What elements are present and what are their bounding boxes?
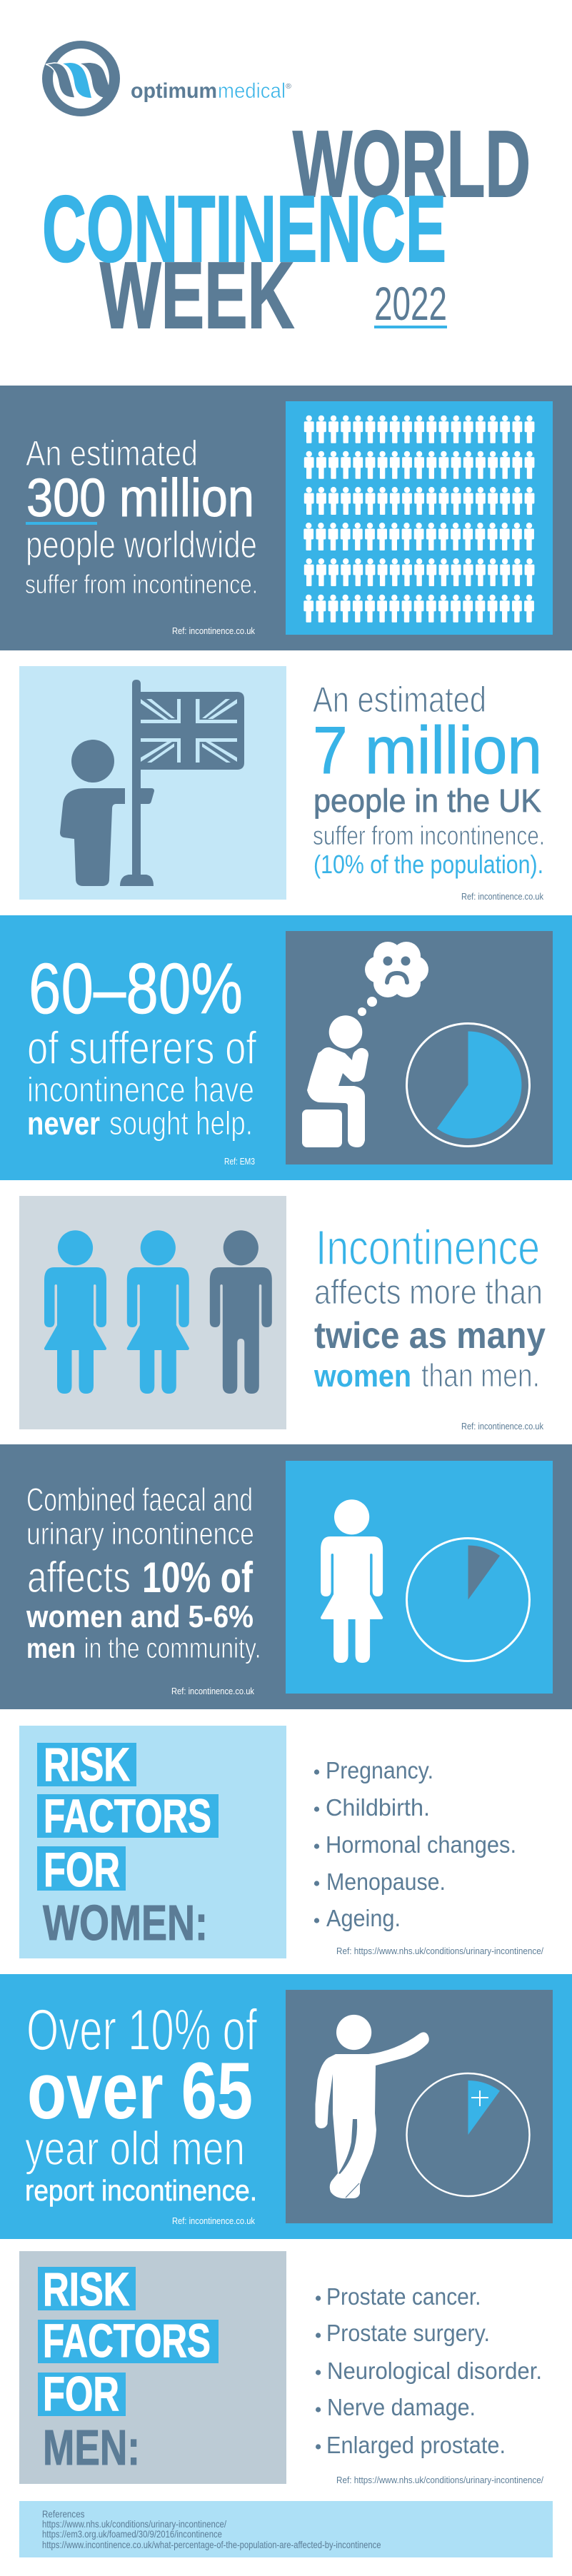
year underline — [374, 326, 447, 328]
headline text: incontinence have — [27, 1071, 254, 1110]
icon: woman — [127, 1230, 189, 1394]
headline text: women and 5-6% — [26, 1599, 254, 1634]
headline text: An estimated — [26, 433, 198, 473]
panel: references — [19, 2501, 553, 2557]
headline text: report incontinence. — [25, 2174, 257, 2207]
light blue box — [19, 1726, 286, 1958]
list: women risk factors: Ageing. — [326, 1905, 401, 1931]
headline text — [26, 1481, 261, 1664]
icon: logo waves — [46, 63, 113, 98]
references text: https://em3.org.uk/foamed/30/9/2016/incontinence — [42, 2528, 222, 2540]
panel: 60-80% never sought help — [0, 915, 572, 1180]
headline text: year old men — [25, 2122, 245, 2175]
people pictogram grid — [303, 416, 534, 623]
headline text: of sufferers of — [27, 1022, 257, 1074]
headline text: suffer from incontinence. — [25, 570, 258, 599]
list: women risk factors: Hormonal changes. — [326, 1831, 516, 1858]
list: women risk factors — [314, 1757, 516, 1931]
panel: twice as many women — [19, 1196, 546, 1432]
slate box — [286, 931, 553, 1164]
icon: woman — [44, 1230, 106, 1394]
headline text: people in the UK — [313, 783, 541, 819]
panel: risk factors for men — [19, 2251, 543, 2485]
title: week: WEEK — [100, 243, 294, 348]
panel: 300 million worldwide — [0, 386, 572, 650]
panel: over 65 men — [0, 1974, 572, 2239]
references text: https://www.nhs.uk/conditions/urinary-incontinence/ — [42, 2518, 226, 2530]
label: factors: FACTORS — [44, 1789, 211, 1842]
headline text: men — [26, 1634, 76, 1664]
icon: man — [210, 1230, 272, 1394]
reference: Ref: https://www.nhs.uk/conditions/urinary-incontinence/ — [336, 1946, 543, 1956]
sad face — [383, 957, 410, 982]
references text: https://www.incontinence.co.uk/what-percentage-of-the-population-are-affected-by-incontinence — [42, 2539, 381, 2550]
references background — [19, 2501, 553, 2557]
title — [42, 111, 531, 348]
references text: References — [42, 2508, 84, 2520]
headline text: 300 million — [26, 468, 254, 528]
grey box — [19, 1196, 286, 1429]
panel: 7 million in the UK — [19, 666, 545, 902]
underline under 300 — [26, 522, 97, 525]
icon: man leaning with crossed legs — [316, 2015, 429, 2198]
headline text — [27, 949, 257, 1142]
list: men risk factors: Enlarged prostate. — [326, 2432, 506, 2458]
label: for: FOR — [43, 2367, 119, 2421]
headline text: than men. — [421, 1357, 540, 1394]
panel: risk factors for women — [19, 1726, 543, 1958]
list: men risk factors — [316, 2283, 542, 2458]
headline text — [313, 1220, 546, 1394]
blue box with people pictogram — [286, 401, 553, 635]
headline text: women — [313, 1359, 411, 1394]
icon: person holding union flag — [60, 680, 244, 886]
light blue box — [19, 666, 286, 900]
blue box — [286, 1461, 553, 1694]
logo wordmark: medical: medical — [218, 79, 286, 103]
headline text: never — [27, 1105, 100, 1142]
reference: Ref: incontinence.co.uk — [172, 2215, 255, 2226]
pie: 10 percent — [407, 1538, 530, 1661]
title: year: 2022 — [374, 277, 447, 330]
list: men risk factors: Nerve damage. — [327, 2394, 476, 2420]
list: men risk factors: Prostate surgery. — [326, 2320, 490, 2346]
reference: Ref: incontinence.co.uk — [461, 1421, 543, 1432]
icon: woman — [321, 1499, 383, 1663]
icon: seated person thinking — [302, 942, 428, 1147]
reference: Ref: https://www.nhs.uk/conditions/urinary-incontinence/ — [336, 2475, 543, 2485]
logo registered mark: ® — [286, 83, 292, 91]
label: risk: RISK — [43, 2263, 130, 2315]
headline text: 10% of — [142, 1554, 254, 1601]
list: women risk factors: Menopause. — [326, 1868, 446, 1895]
union flag cutouts — [141, 699, 237, 763]
headline text — [25, 433, 258, 599]
headline text — [25, 1998, 257, 2207]
reference: Ref: incontinence.co.uk — [171, 1686, 254, 1696]
headline text: 7 million — [313, 713, 542, 788]
headline text: 60–80% — [29, 949, 243, 1029]
logo wordmark: optimum: optimum — [131, 79, 217, 103]
headline text: An estimated — [313, 680, 486, 720]
headline text: over 65 — [27, 2046, 253, 2135]
headline text: affects more than — [314, 1274, 543, 1312]
headline text: Combined faecal and — [26, 1481, 253, 1518]
reference: Ref: EM3 — [224, 1156, 255, 1167]
grey box — [19, 2251, 286, 2484]
headline text: Over 10% of — [26, 1998, 257, 2063]
pie: 60-80 percent — [407, 1024, 530, 1147]
label: women: WOMEN: — [43, 1895, 208, 1951]
headline text: urinary incontinence — [26, 1516, 254, 1551]
reference: Ref: incontinence.co.uk — [172, 625, 255, 636]
label: for: FOR — [44, 1843, 120, 1897]
list: women risk factors: Childbirth. — [326, 1794, 430, 1821]
references text — [42, 2508, 381, 2550]
headline text: affects — [27, 1553, 131, 1601]
label: factors: FACTORS — [43, 2314, 211, 2367]
blue background — [0, 1974, 572, 2239]
icon: logo ring — [42, 41, 120, 116]
headline text: in the community. — [84, 1633, 261, 1664]
reference: Ref: incontinence.co.uk — [461, 891, 543, 902]
headline text: twice as many — [314, 1315, 546, 1357]
blue background — [0, 915, 572, 1180]
panel background — [0, 386, 572, 650]
label: men: MEN: — [43, 2420, 140, 2475]
headline text: people worldwide — [26, 524, 257, 566]
slate box — [286, 1990, 553, 2223]
pie: over 10 percent — [407, 2073, 530, 2196]
list: women risk factors: Pregnancy. — [326, 1757, 433, 1783]
headline text: sought help. — [109, 1105, 253, 1142]
slate background — [0, 1444, 572, 1709]
label: risk: RISK — [44, 1738, 130, 1791]
logo: optimum medical — [42, 41, 292, 116]
list: men risk factors: Prostate cancer. — [326, 2283, 481, 2310]
panel: combined incontinence 10% women — [0, 1444, 572, 1709]
list: men risk factors: Neurological disorder. — [327, 2358, 542, 2384]
headline text — [313, 680, 545, 879]
